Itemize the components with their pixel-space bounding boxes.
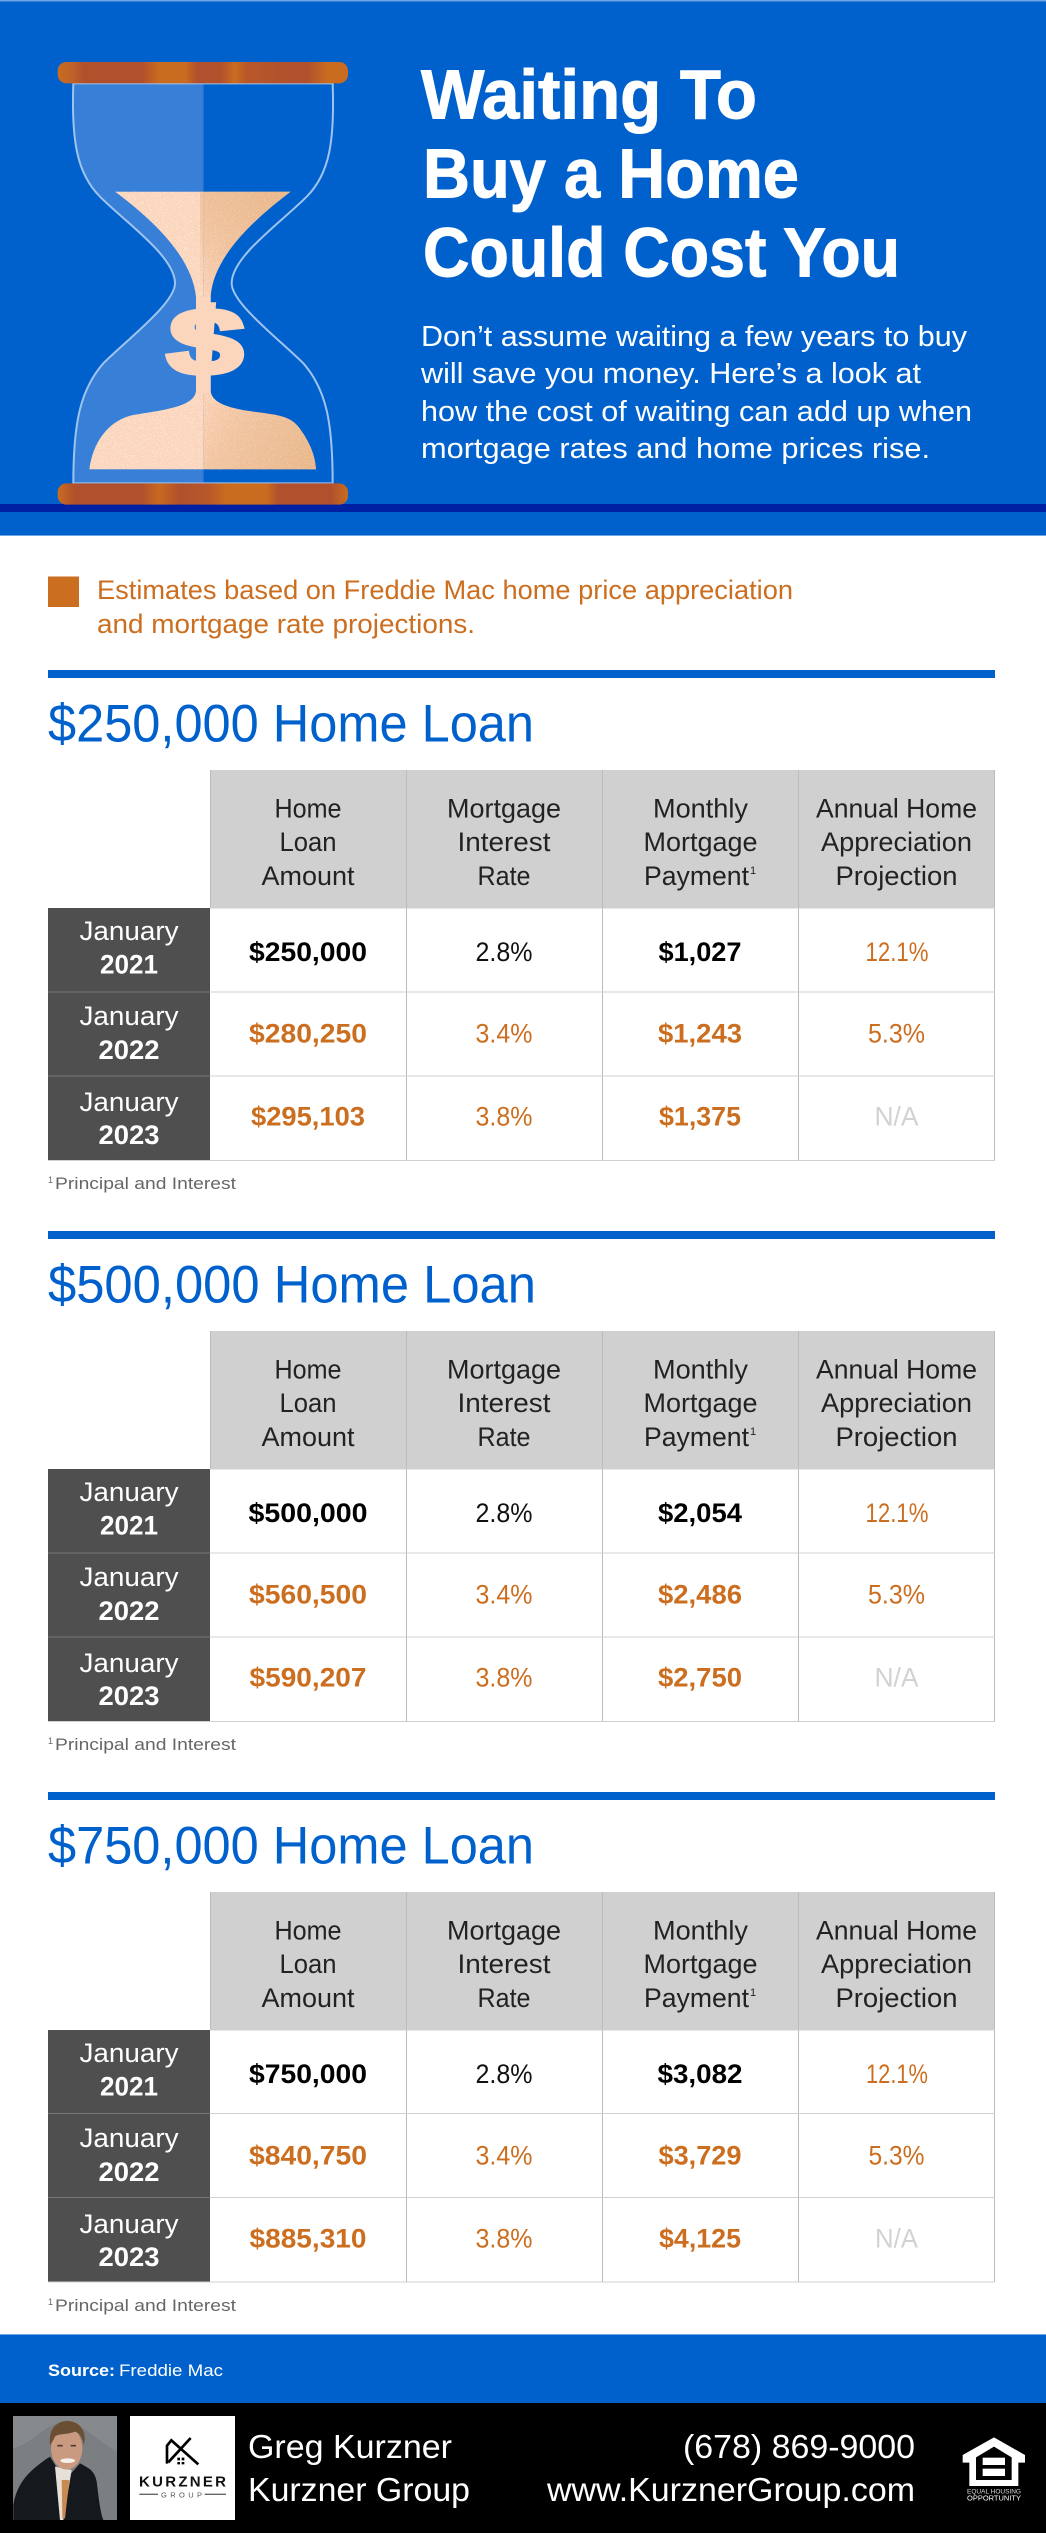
heading: $750,000 home loan: $750,000 Home Loan [48,1817,534,1876]
table: $500,000 loan: Projection [836,1422,958,1452]
table: $500,000 loan: $590,207 [250,1662,366,1692]
agent name: Greg Kurzner [248,2429,452,2466]
logo: Kurzner Group: KURZNER [139,2474,226,2491]
table: $750,000 loan: 12.1% [866,2059,928,2089]
table: $250,000 loan: Home [274,794,342,824]
table: $750,000 loan: $885,310 [250,2224,366,2254]
table: $250,000 loan: $250,000 [249,937,367,967]
contact details: www.KurznerGroup.com [546,2472,915,2509]
table: $500,000 loan: Payment [644,1422,750,1452]
footnote: 1 [48,1175,53,1185]
table: $500,000 loan: 1 [750,1426,756,1438]
table: $250,000 loan: Rate [478,861,530,891]
footnote: 1 [48,2297,53,2307]
table: $750,000 loan: Mortgage [644,1949,758,1979]
icon: equal housing opportunity: OPPORTUNITY [967,2494,1021,2502]
table: $250,000 loan: 2022 [98,1035,160,1065]
table: $500,000 loan: January [80,1477,179,1507]
table: $500,000 loan: Mortgage [447,1354,561,1384]
panel: agent footer [0,2403,1046,2533]
table: $750,000 loan: 2021 [100,2072,158,2102]
table: $250,000 loan: Loan [280,827,336,857]
intro text block: will save you money. Here’s a look at [420,358,921,390]
table: $250,000 loan: Payment [644,861,750,891]
table: $250,000 loan: 2.8% [476,937,532,967]
estimates note [97,575,793,639]
panel: header banner [0,0,1046,536]
table: $250,000 loan: 3.8% [476,1102,532,1132]
table: $250,000 loan: $1,027 [658,937,742,967]
table: $250,000 loan: January [80,916,179,946]
intro text block: Don’t assume waiting a few years to buy [421,321,968,353]
table: $500,000 loan: Rate [478,1422,530,1452]
table: $750,000 loan: Payment [644,1983,750,2013]
table: $750,000 loan: Annual Home [816,1916,977,1946]
agent name: Kurzner Group [248,2472,470,2509]
photo: agent portrait [13,2416,117,2520]
source text: Freddie Mac [119,2361,224,2380]
table: $250,000 loan: Mortgage [447,794,561,824]
table: $250,000 loan: 2023 [98,1120,160,1150]
table: $250,000 loan: January [80,1001,179,1031]
table: $500,000 loan: 12.1% [866,1498,928,1528]
contact details: (678) 869-9000 [683,2429,915,2466]
table: $750,000 loan: 2.8% [476,2059,532,2089]
footnote: Principal and Interest [55,1174,236,1193]
table: $500,000 loan: Amount [262,1422,355,1452]
logo: Kurzner Group [130,2416,235,2520]
table: $500,000 loan: 2022 [98,1596,160,1626]
title: Waiting To [421,55,757,133]
table: $500,000 loan: Interest [458,1388,551,1418]
table: $500,000 loan: 3.4% [476,1580,532,1610]
table: $750,000 loan: 5.3% [868,2140,924,2170]
intro text block: mortgage rates and home prices rise. [421,433,930,465]
table: $750,000 loan: 2023 [98,2242,160,2272]
table: $250,000 loan: Interest [458,827,551,857]
source band [0,2334,1046,2403]
table: $250,000 loan: 5.3% [868,1018,925,1048]
icon: hourglass with dollar sign [58,62,348,505]
title: Could Cost You [423,214,900,292]
table: $750,000 loan: Interest [458,1949,551,1979]
table: $250,000 loan: $280,250 [249,1018,367,1048]
table: $250,000 loan [48,770,995,1160]
icon: equal housing opportunity [963,2437,1025,2502]
table: $250,000 loan: $1,375 [659,1102,741,1132]
table: $500,000 loan: January [80,1562,179,1592]
heading: $250,000 home loan: $250,000 Home Loan [48,695,534,754]
panel: $750,000 home loan [48,1792,995,2315]
estimates note: Estimates based on Freddie Mac home price appreciation [97,575,793,605]
table: $500,000 loan: 5.3% [868,1580,925,1610]
table: $250,000 loan: 1 [750,865,756,877]
table: $750,000 loan: January [80,2038,179,2068]
title: Buy a Home [423,134,799,212]
footnote: Principal and Interest [55,2296,236,2315]
table: $750,000 loan: 3.4% [476,2140,532,2170]
panel: $500,000 home loan [48,1231,995,1754]
table: $500,000 loan: $560,500 [249,1580,367,1610]
table: $500,000 loan: 3.8% [476,1662,532,1692]
table: $750,000 loan: Mortgage [447,1916,561,1946]
table: $250,000 loan: 3.4% [476,1018,532,1048]
title [421,55,900,292]
heading: $500,000 home loan: $500,000 Home Loan [48,1256,536,1315]
source text: Source: [48,2361,115,2380]
table: $750,000 loan: 3.8% [476,2224,532,2254]
table: $250,000 loan: Annual Home [816,794,977,824]
table: $750,000 loan [48,1892,995,2282]
footnote: 1 [48,1736,53,1746]
footnote: Principal and Interest [55,1735,236,1754]
contact details [546,2429,915,2509]
table: $500,000 loan: Appreciation [821,1388,972,1418]
table: $750,000 loan: $4,125 [659,2224,741,2254]
table: $250,000 loan: $1,243 [658,1018,742,1048]
panel: $250,000 home loan [48,670,995,1193]
table: $250,000 loan: January [80,1087,179,1117]
table: $750,000 loan: $3,082 [658,2059,742,2089]
intro text block: how the cost of waiting can add up when [421,396,972,428]
agent name [248,2429,470,2509]
table: $750,000 loan: N/A [875,2224,918,2254]
table: $500,000 loan: January [80,1648,179,1678]
table: $250,000 loan: 12.1% [866,937,928,967]
table: $750,000 loan: 1 [750,1987,756,1999]
table: $500,000 loan: $2,486 [658,1580,742,1610]
icon: orange square bullet [48,576,79,607]
table: $500,000 loan: Loan [280,1388,336,1418]
table: $750,000 loan: Monthly [653,1916,749,1946]
intro text block [420,321,972,465]
table: $250,000 loan: Amount [262,861,355,891]
icon: equal housing opportunity: EQUAL HOUSING [967,2488,1021,2496]
table: $250,000 loan: N/A [874,1102,919,1132]
logo: Kurzner Group: GROUP [161,2490,202,2500]
table: $250,000 loan: 2021 [100,950,158,980]
table: $750,000 loan: Home [274,1916,342,1946]
table: $500,000 loan: Mortgage [644,1388,758,1418]
table: $500,000 loan: $2,750 [658,1662,742,1692]
table: $250,000 loan: Appreciation [821,827,972,857]
table: $750,000 loan: $3,729 [658,2140,742,2170]
table: $750,000 loan: Loan [280,1949,336,1979]
table: $500,000 loan: N/A [874,1662,919,1692]
icon: hourglass with dollar sign: $ [164,289,248,394]
table: $750,000 loan: January [80,2209,179,2239]
table: $500,000 loan [48,1331,995,1722]
table: $500,000 loan: $2,054 [658,1498,742,1528]
table: $500,000 loan: Monthly [653,1354,749,1384]
table: $750,000 loan: $750,000 [249,2059,367,2089]
table: $750,000 loan: 2022 [98,2157,160,2187]
table: $500,000 loan: Annual Home [816,1354,977,1384]
table: $750,000 loan: January [80,2123,179,2153]
table: $750,000 loan: Amount [262,1983,355,2013]
table: $750,000 loan: Rate [478,1983,530,2013]
table: $250,000 loan: Projection [836,861,958,891]
table: $500,000 loan: 2.8% [476,1498,532,1528]
table: $500,000 loan: Home [274,1354,342,1384]
table: $750,000 loan: $840,750 [249,2140,367,2170]
table: $250,000 loan: $295,103 [251,1102,365,1132]
table: $500,000 loan: 2021 [100,1510,158,1540]
table: $750,000 loan: Projection [836,1983,958,2013]
table: $250,000 loan: Monthly [653,794,749,824]
table: $750,000 loan: Appreciation [821,1949,972,1979]
table: $500,000 loan: 2023 [98,1681,160,1711]
table: $500,000 loan: $500,000 [248,1498,368,1528]
table: $250,000 loan: Mortgage [644,827,758,857]
estimates note: and mortgage rate projections. [97,609,475,639]
